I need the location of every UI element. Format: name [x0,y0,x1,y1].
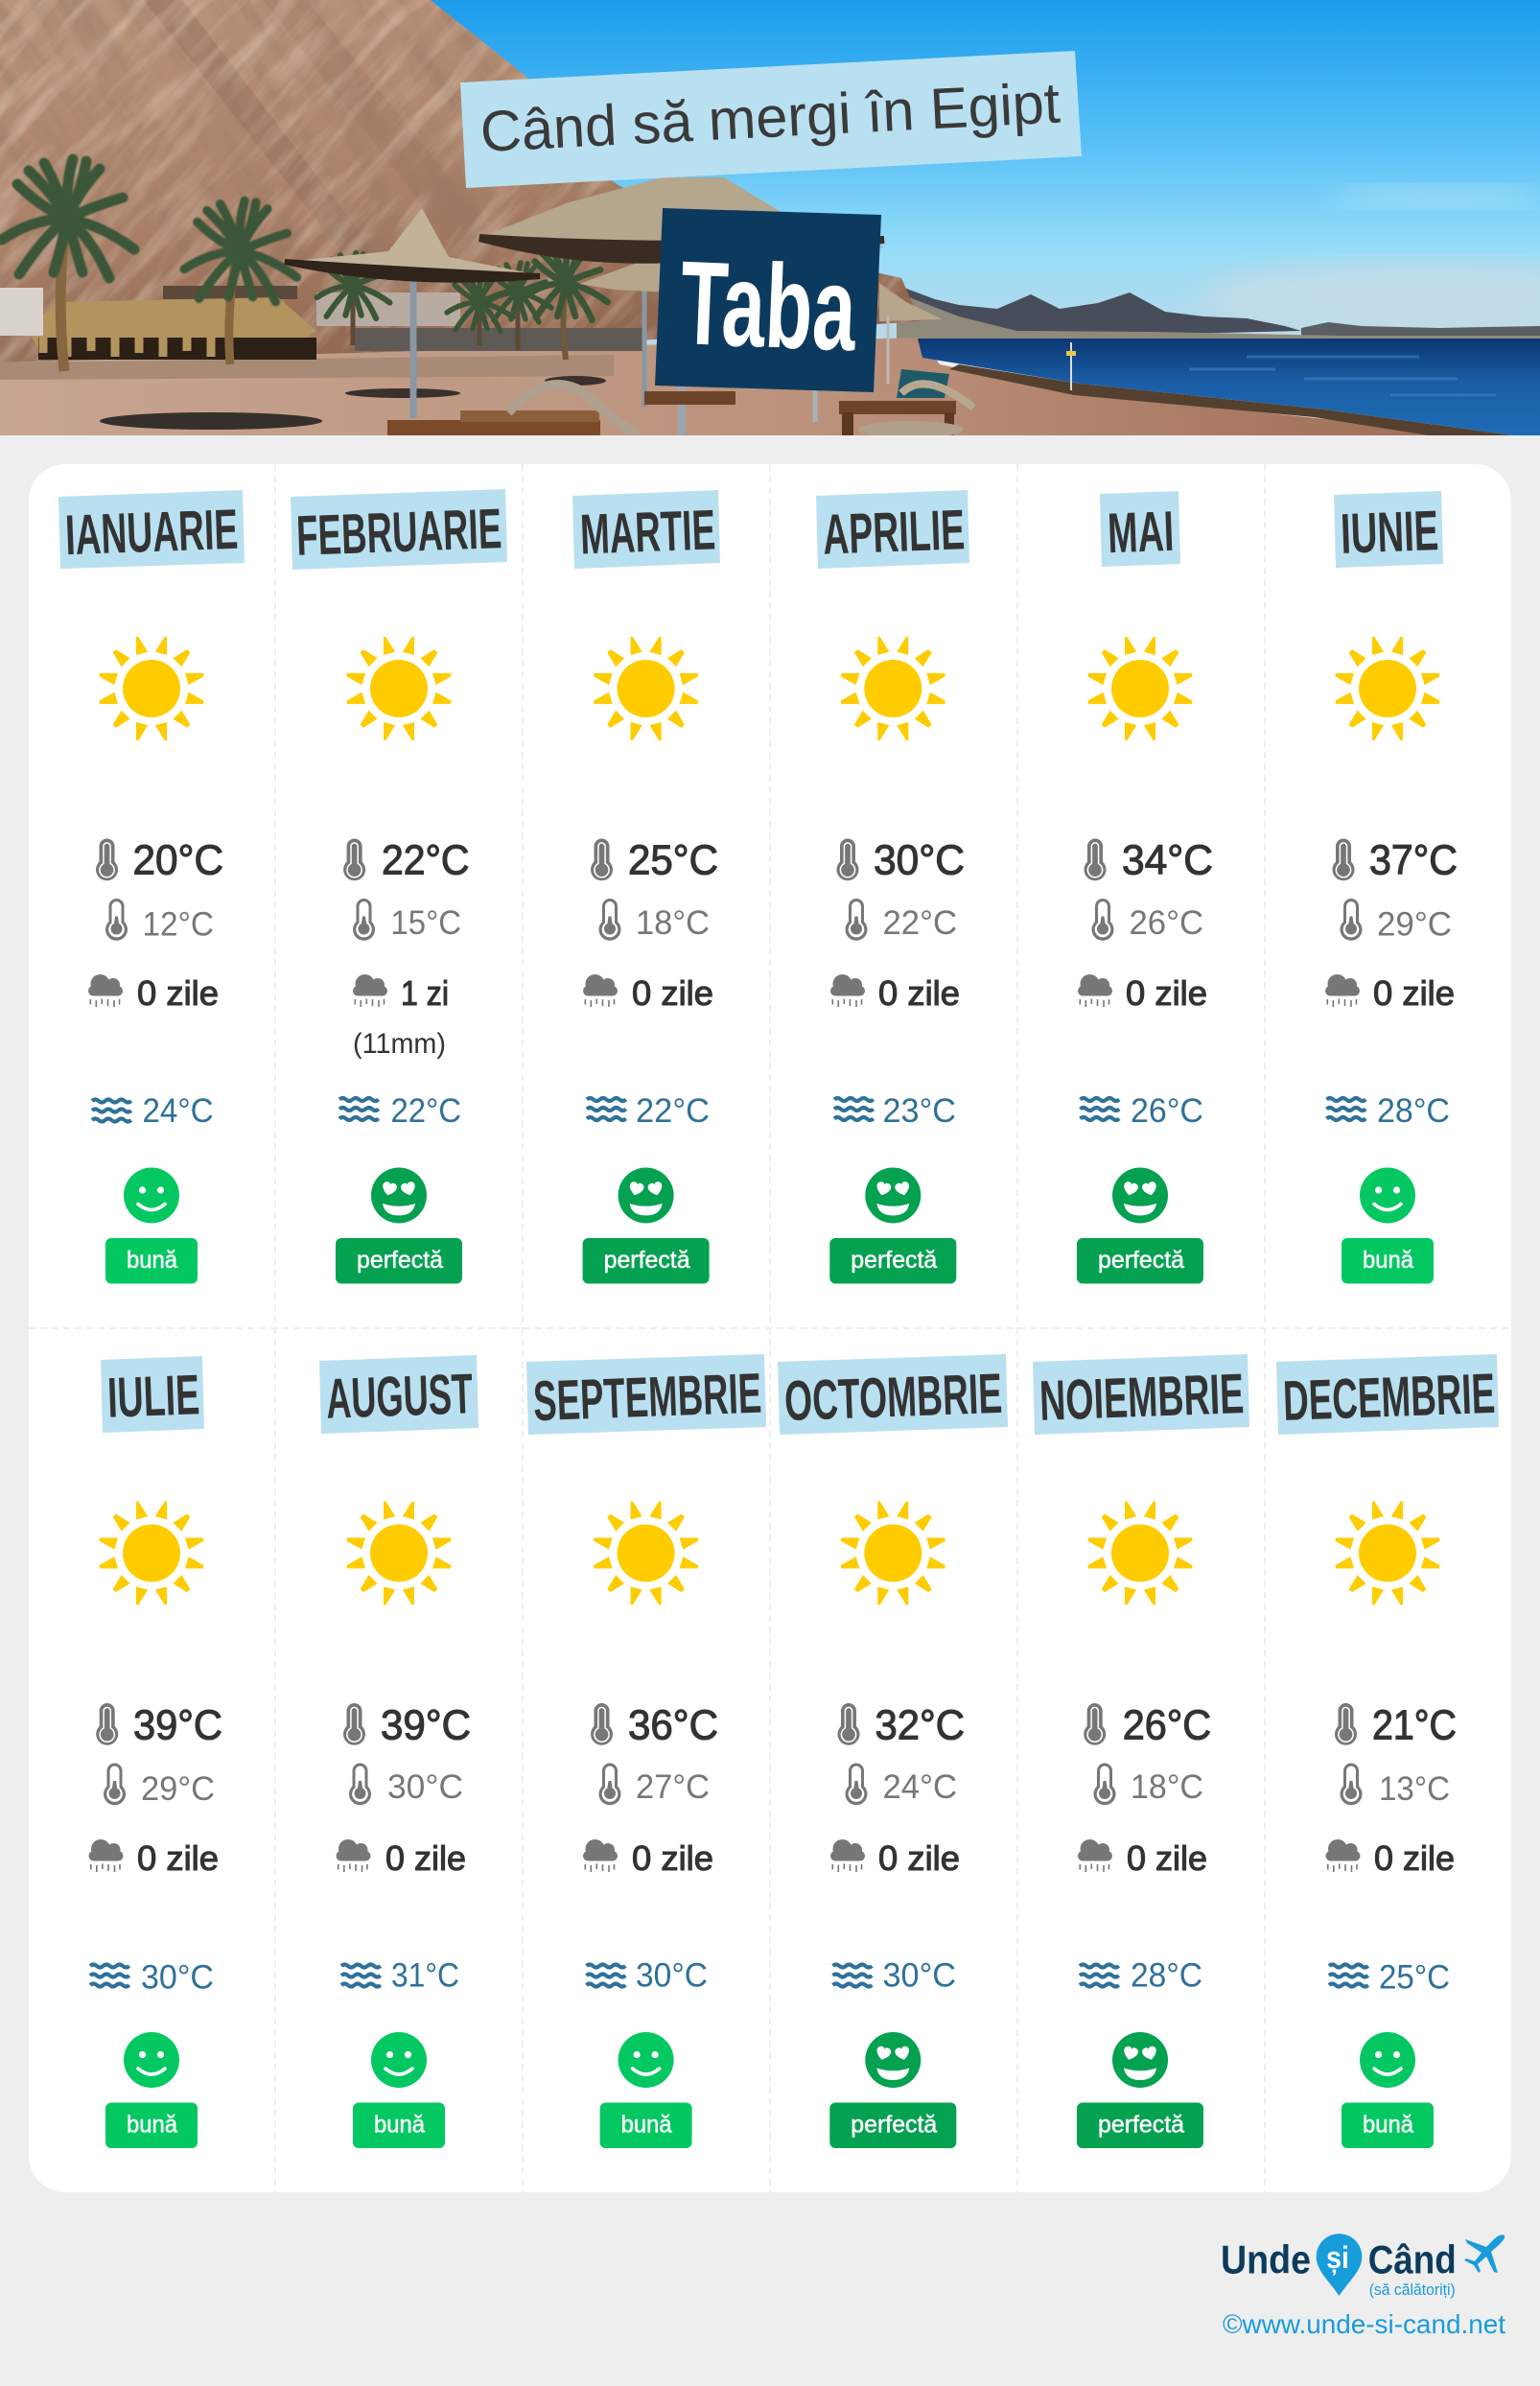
month: Octombrie: 24°C [882,1768,957,1806]
month: Iunie: IUNIE [1340,499,1439,566]
month: Octombrie: 0 zile [878,1838,960,1878]
month: Iulie: bună [127,2112,177,2139]
month: Mai: 34°C [1122,838,1213,884]
month: Februarie: 22°C [391,1092,461,1130]
month: Decembrie: bună [1363,2112,1413,2139]
month: Martie: 0 zile [632,973,713,1013]
month: Aprilie: 23°C [882,1092,956,1130]
logo: Unde și Când: și [1326,2240,1349,2275]
month: Decembrie: 21°C [1372,1702,1457,1748]
month: Septembrie: SEPTEMBRIE [532,1362,762,1433]
logo: Unde și Când: (să călătoriți) [1369,2281,1456,2299]
month: Septembrie: 36°C [628,1702,718,1748]
month: Aprilie: 0 zile [878,973,960,1013]
logo: Unde și Când [1221,2234,1505,2299]
month: Aprilie: 22°C [882,904,957,942]
month: Decembrie: 25°C [1379,1958,1450,1996]
month: Noiembrie: perfectă [1098,2112,1184,2139]
month: Septembrie: bună [621,2112,672,2139]
month: Decembrie [1276,1354,1499,2148]
month: Iulie: 29°C [141,1770,215,1808]
month: Octombrie [778,1354,1008,2148]
month: Iulie: 30°C [141,1958,214,1996]
calendar card [29,464,1511,2192]
month: August: 30°C [387,1768,463,1806]
month: August: 31°C [391,1957,459,1995]
month: Iunie: 29°C [1377,905,1452,944]
month: Noiembrie: 26°C [1123,1702,1211,1748]
month: Februarie: FEBRUARIE [295,497,502,568]
month: Februarie: 1 zi [401,973,449,1013]
month: Noiembrie: NOIEMBRIE [1038,1362,1245,1433]
location banner: Taba: Taba [678,237,859,376]
icon: airplane [1464,2234,1505,2273]
month: Noiembrie [1033,1354,1249,2148]
month: Martie: 22°C [636,1092,710,1130]
month: Decembrie: 13°C [1379,1770,1450,1808]
month: Decembrie: 0 zile [1374,1838,1455,1878]
month: Iunie: 37°C [1369,838,1458,884]
month: Iunie: bună [1363,1247,1413,1274]
icon: location pin [1317,2234,1362,2296]
month: Septembrie [526,1354,766,2148]
month: Ianuarie: 0 zile [137,973,219,1013]
title banner [460,51,1082,188]
month: August: AUGUST [325,1362,474,1431]
month: Martie: MARTIE [579,498,716,567]
month: Aprilie [816,490,969,1283]
month: Aprilie: perfectă [851,1247,937,1274]
month: Iunie: 28°C [1377,1092,1450,1130]
month: Octombrie: perfectă [851,2112,937,2139]
month: Octombrie: 32°C [875,1702,965,1748]
month: Ianuarie [58,490,245,1283]
month: Iunie [1325,491,1458,1283]
month: Februarie: 15°C [391,904,461,942]
month: Ianuarie: 12°C [142,905,214,944]
month: August: bună [374,2112,425,2139]
month: August [319,1355,478,2148]
header photo: Taba beach [0,0,1540,435]
month: Iulie: IULIE [106,1363,200,1430]
month: Martie: perfectă [604,1247,690,1274]
logo: Unde și Când: Unde [1221,2237,1311,2282]
month: August: 0 zile [385,1838,466,1878]
month: Aprilie: APRILIE [822,498,966,567]
logo: Unde și Când: Când [1368,2237,1457,2282]
month: Septembrie: 30°C [636,1957,708,1995]
month: Martie: 18°C [636,904,710,942]
month: Iulie: 39°C [133,1702,222,1748]
month: Mai: MAI [1107,500,1175,565]
month: Mai: 0 zile [1126,973,1207,1013]
month: Februarie [291,489,507,1283]
month: Ianuarie: IANUARIE [64,498,239,567]
title banner: Când să mergi în Egipt [478,70,1062,164]
month: Octombrie: OCTOMBRIE [783,1362,1003,1433]
location banner: Taba [655,208,881,392]
month: August: 39°C [381,1702,471,1748]
month: Noiembrie: 0 zile [1127,1838,1207,1878]
month: Noiembrie: 18°C [1131,1768,1203,1806]
month: Iulie: 0 zile [137,1838,219,1878]
month: Ianuarie: bună [127,1247,177,1274]
month: Iulie [88,1356,222,2148]
month: Octombrie: 30°C [882,1957,956,1995]
month: Aprilie: 30°C [874,838,965,884]
month: Februarie: perfectă [357,1247,443,1274]
month: Martie: 25°C [628,838,718,884]
month: Mai: 26°C [1130,904,1203,942]
month: Iunie: 0 zile [1373,973,1455,1013]
month: Martie [572,490,720,1283]
month: Ianuarie: 24°C [142,1092,213,1130]
month: Februarie: 22°C [382,838,470,884]
month: Noiembrie: 28°C [1131,1957,1202,1995]
month: Septembrie: 27°C [636,1768,710,1806]
month: Mai: 26°C [1131,1092,1203,1130]
month: Mai: perfectă [1098,1247,1184,1274]
website credit: ©www.unde-si-cand.net [1223,2309,1505,2339]
month: Ianuarie: 20°C [132,838,223,884]
month: Mai [1077,491,1213,1283]
month: Septembrie: 0 zile [632,1838,713,1878]
month: Februarie: (11mm) [353,1028,446,1060]
